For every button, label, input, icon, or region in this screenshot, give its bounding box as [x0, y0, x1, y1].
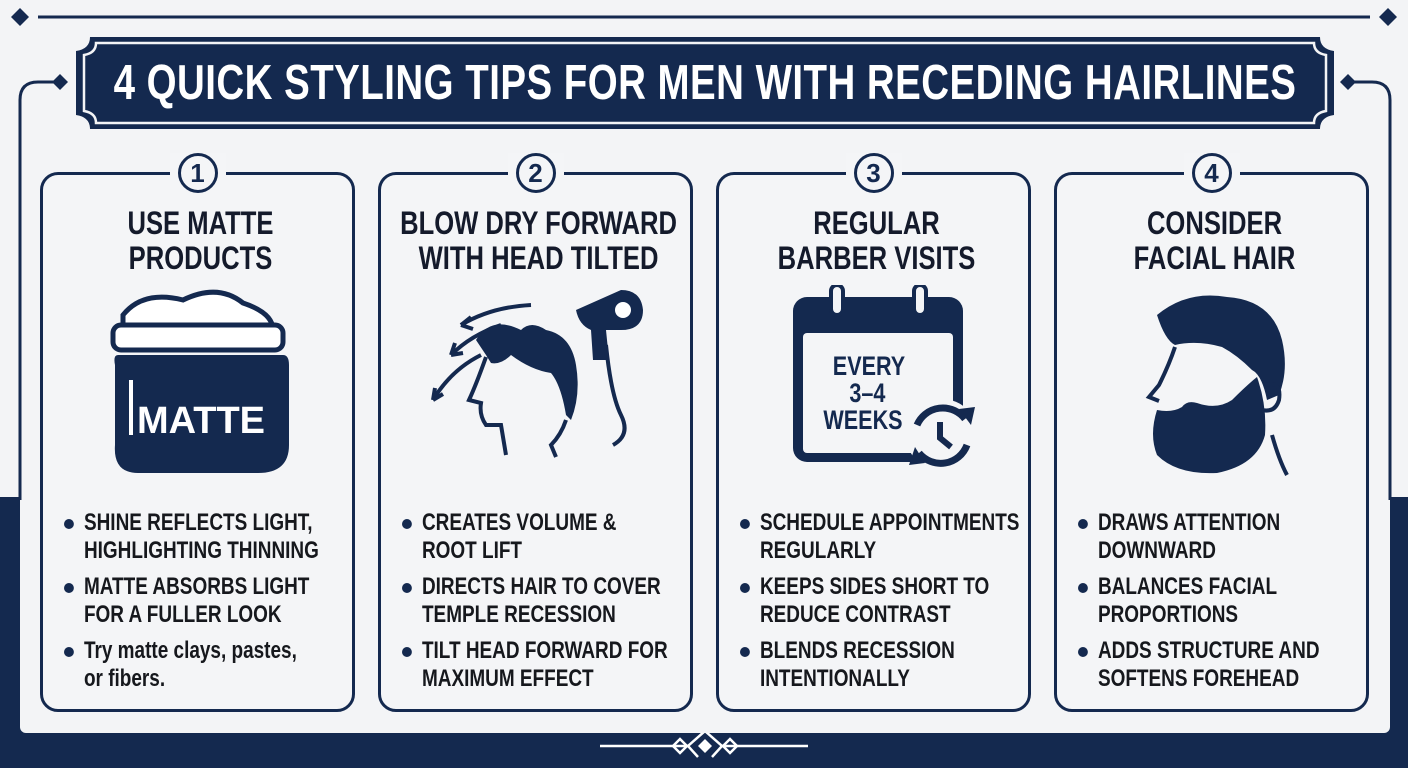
title banner: [76, 37, 1334, 129]
bullets 2: DIRECTS HAIR TO COVER: [422, 573, 661, 600]
bullets 2: [402, 509, 668, 692]
bullets 4: DOWNWARD: [1098, 537, 1216, 564]
bullets 2: TILT HEAD FORWARD FOR: [422, 637, 668, 664]
bullets 3: REDUCE CONTRAST: [760, 601, 951, 628]
bullets 1: FOR A FULLER LOOK: [84, 601, 282, 628]
number 1: 1: [190, 158, 205, 188]
bullets 2: ROOT LIFT: [422, 537, 522, 564]
bullets 1: SHINE REFLECTS LIGHT,: [84, 509, 313, 536]
bullets 3: REGULARLY: [760, 537, 876, 564]
bullets 3: [740, 509, 1019, 692]
heading 1: USE MATTE: [127, 205, 274, 241]
heading 2: BLOW DRY FORWARD: [400, 205, 677, 241]
icon: calendar with clock: WEEKS: [823, 406, 903, 436]
heading 3: REGULAR: [813, 205, 940, 241]
number 4: [1184, 153, 1240, 195]
heading 2: [400, 205, 677, 276]
bullets 3: INTENTIONALLY: [760, 665, 910, 692]
icon: bearded profile: [1146, 296, 1289, 476]
bullets 2: MAXIMUM EFFECT: [422, 665, 594, 692]
bullets 4: SOFTENS FOREHEAD: [1098, 665, 1299, 692]
bullets 1: HIGHLIGHTING THINNING: [84, 537, 319, 564]
bullets 4: ADDS STRUCTURE AND: [1098, 637, 1320, 664]
title banner: 4 QUICK STYLING TIPS FOR MEN WITH RECEDING HAIRLINES: [114, 56, 1296, 110]
heading 1: PRODUCTS: [129, 240, 272, 276]
bullets 4: PROPORTIONS: [1098, 601, 1238, 628]
bullets 1: or fibers.: [84, 665, 165, 692]
bottom navy background: [0, 497, 1408, 768]
bullets 3: BLENDS RECESSION: [760, 637, 955, 664]
heading 1: [127, 205, 274, 276]
bullets 1: [64, 509, 319, 692]
heading 4: CONSIDER: [1147, 205, 1282, 241]
number 4: 4: [1204, 158, 1219, 188]
number 2: [508, 153, 564, 195]
panel: tip 1: [40, 172, 355, 712]
icon: calendar with clock: 3–4: [849, 379, 886, 409]
bullets 4: DRAWS ATTENTION: [1098, 509, 1280, 536]
icon: head with hair dryer: [431, 290, 643, 458]
icon: matte jar: [110, 290, 289, 473]
number 3: 3: [866, 158, 881, 188]
bullets 3: SCHEDULE APPOINTMENTS: [760, 509, 1019, 536]
number 3: [846, 153, 902, 195]
heading 3: BARBER VISITS: [778, 240, 975, 276]
bullets 3: KEEPS SIDES SHORT TO: [760, 573, 989, 600]
bullets 1: Try matte clays, pastes,: [84, 637, 297, 664]
bullets 4: BALANCES FACIAL: [1098, 573, 1277, 600]
number 2: 2: [528, 158, 543, 188]
bullets 2: CREATES VOLUME &: [422, 509, 616, 536]
icon: calendar with clock: EVERY: [833, 352, 905, 382]
panel: tip 2: [378, 172, 693, 712]
panel: tip 3: [716, 172, 1031, 712]
bullets 4: [1078, 509, 1320, 692]
heading 4: FACIAL HAIR: [1134, 240, 1295, 276]
icon: matte jar: MATTE: [137, 400, 265, 442]
heading 2: WITH HEAD TILTED: [419, 240, 658, 276]
heading 3: [778, 205, 975, 276]
bullets 1: MATTE ABSORBS LIGHT: [84, 573, 309, 600]
panel: tip 4: [1054, 172, 1369, 712]
bottom ornament: [600, 733, 808, 758]
heading 4: [1134, 205, 1295, 276]
bullets 2: TEMPLE RECESSION: [422, 601, 616, 628]
number 1: [170, 153, 226, 195]
icon: calendar with clock: [793, 285, 975, 467]
